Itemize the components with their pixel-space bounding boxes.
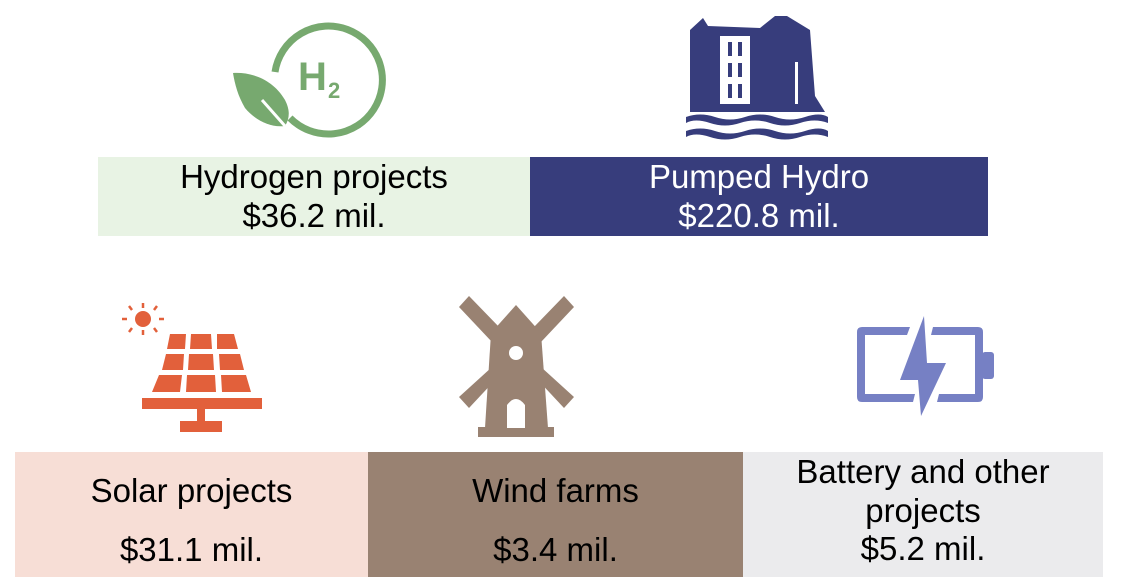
panel: wind: Wind farms bbox=[472, 472, 639, 509]
panel: solar bbox=[15, 452, 368, 577]
panel: pumped hydro: $220.8 mil. bbox=[678, 197, 840, 234]
panel: hydrogen: $36.2 mil. bbox=[242, 197, 386, 234]
panel: hydrogen bbox=[98, 157, 530, 236]
panel: pumped hydro bbox=[530, 157, 988, 236]
panel: battery bbox=[743, 452, 1103, 577]
panel: solar: $31.1 mil. bbox=[120, 531, 263, 568]
panel: solar: Solar projects bbox=[91, 472, 292, 509]
panel: battery: $5.2 mil. bbox=[861, 530, 985, 567]
panel: wind bbox=[368, 452, 743, 577]
panel: hydrogen: Hydrogen projects bbox=[180, 158, 448, 195]
panel: battery: projects bbox=[865, 492, 981, 529]
icon: hydrogen leaf H2: H bbox=[298, 55, 327, 99]
panel: pumped hydro: Pumped Hydro bbox=[649, 158, 869, 195]
icon: hydrogen leaf H2: 2 bbox=[328, 78, 340, 103]
panel: wind: $3.4 mil. bbox=[493, 531, 618, 568]
panel: battery: Battery and other bbox=[796, 453, 1050, 490]
